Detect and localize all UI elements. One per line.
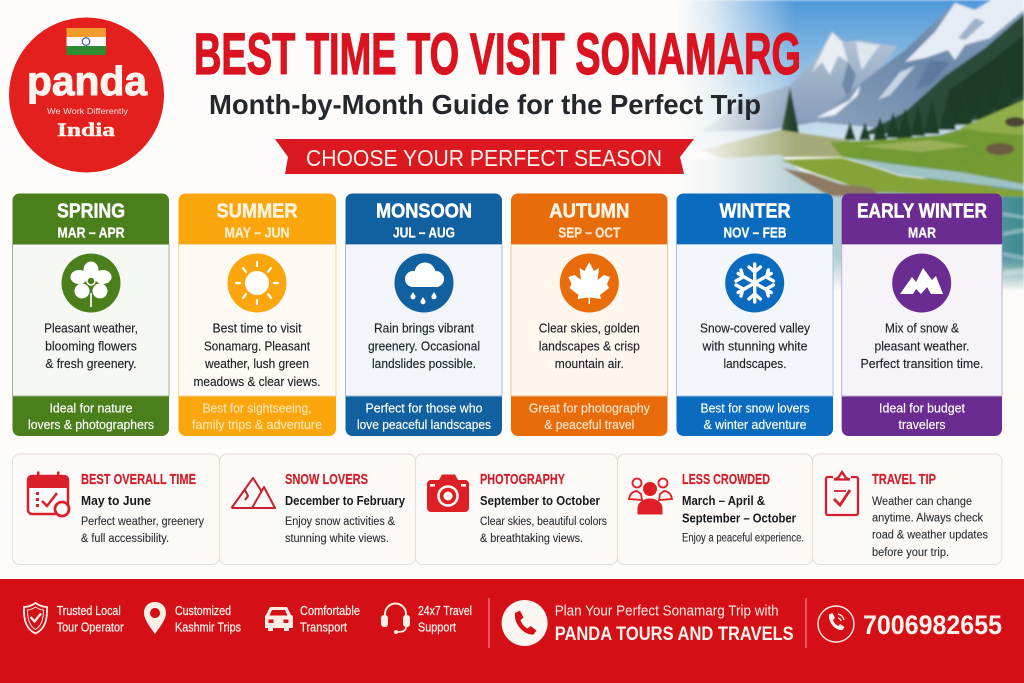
panel: autumn: SEP – OCT [558,226,620,242]
panel: summer: Best for sightseeing, [202,402,312,416]
panel: photography [416,454,618,564]
icon: headset [381,604,410,634]
call to action: Plan Your Perfect Sonamarg Trip with [555,603,779,620]
panel: summer: family trips & adventure [192,418,322,432]
panel: best overall time: & full accessibility. [81,533,169,545]
icon: phone ring [818,606,854,642]
panel: summer: weather, lush green [204,357,309,371]
panel: snow lovers [220,454,416,564]
panel: early winter: pleasant weather. [874,340,970,354]
24x7 travel support: Support [418,621,456,635]
logo country: India [57,120,116,141]
trusted local tour operator: Trusted Local [57,604,121,618]
panel: best overall time: Perfect weather, greenery [81,516,204,528]
panel: monsoon: love peaceful landscapes [357,418,491,432]
panel: photography: September to October [480,493,600,508]
icon: snowy mountains [892,254,951,312]
panel: snow lovers: Enjoy snow activities & [285,516,395,528]
panel: monsoon: JUL – AUG [393,226,455,242]
panel: less crowded: March – April & [682,493,765,508]
ribbon: choose your perfect season [275,139,694,174]
trusted local tour operator [24,603,124,635]
panel: less crowded [618,454,812,564]
panel: travel tip: road & weather updates [872,530,988,542]
panel: less crowded: Enjoy a peaceful experience. [682,533,804,545]
icon: sun [228,254,286,312]
landscape photo: Sonamarg valley [670,0,1024,290]
panel: spring: & fresh greenery. [45,357,137,371]
panel: best overall time [12,454,220,564]
panel: photography: & breathtaking views. [480,533,583,545]
panel: monsoon: MONSOON [376,201,472,223]
phone number [818,606,1002,642]
icon: calendar [28,472,69,516]
icon: map pin [144,602,166,634]
panel: photography: PHOTOGRAPHY [480,471,565,488]
panel: spring: lovers & photographers [28,418,154,432]
panel: summer: SUMMER [216,201,298,223]
logo wordmark: panda [27,58,148,104]
panel: snow lovers: SNOW LOVERS [285,471,368,488]
icon: snowflake [725,254,784,312]
panel: spring [12,194,169,436]
panel: monsoon: greenery. Occasional [368,340,480,354]
icon: phone in white circle [502,600,548,646]
panel: monsoon [346,194,502,436]
panel: early winter: Ideal for budget [879,402,966,416]
logo badge [9,18,164,172]
comfortable transport [265,604,360,635]
icon: flower [62,254,120,312]
panel: monsoon: Rain brings vibrant [374,322,475,336]
24x7 travel support: 24x7 Travel [418,604,472,618]
panel: summer: MAY – JUN [224,226,290,242]
comfortable transport: Transport [300,621,347,635]
icon: maple leaf [560,254,619,312]
panel: best overall time: May to June [81,493,151,508]
panel: photography: Clear skies, beautiful colors [480,516,607,528]
panel: early winter [842,194,1002,436]
panel: travel tip [812,454,1002,564]
panel: spring: Ideal for nature [50,402,133,416]
icon: car [265,607,293,631]
icon: clipboard checklist [826,472,858,515]
panel: winter: landscapes. [724,357,786,371]
panel: travel tip: TRAVEL TIP [872,471,936,488]
panel: spring: Pleasant weather, [44,322,138,336]
icon: people group [629,478,672,514]
panel: winter: with stunning white [702,340,808,354]
panel: autumn: Great for photography [529,402,651,416]
panel: spring: SPRING [57,201,125,223]
panel: travel tip: anytime. Always check [872,513,983,525]
customized kashmir trips [144,602,241,635]
trusted local tour operator: Tour Operator [57,621,124,635]
panel: spring: blooming flowers [45,340,137,354]
call to action [502,600,794,646]
icon: rain cloud [394,254,454,312]
panel: monsoon: Perfect for those who [366,402,483,416]
panel: monsoon: landslides possible. [372,357,476,371]
panel: autumn [511,194,668,436]
icon: outlined mountains [232,478,275,508]
panel: summer: meadows & clear views. [194,375,320,389]
comfortable transport: Comfortable [300,604,360,618]
icon: shield [24,603,47,634]
panel: less crowded: September – October [682,511,796,526]
panel: early winter: MAR [908,226,936,242]
24x7 travel support [381,604,472,635]
panel: early winter: Mix of snow & [885,322,960,336]
panel: early winter: travelers [898,418,946,432]
panel: early winter: Perfect transition time. [860,357,984,371]
customized kashmir trips: Customized [175,604,231,618]
panel: autumn: landscapes & crisp [539,340,640,354]
panel: winter: & winter adventure [704,418,807,432]
panel: summer: Best time to visit [212,322,302,336]
panel: travel tip: before your trip. [872,547,949,559]
customized kashmir trips: Kashmir Trips [175,621,241,635]
call to action: PANDA TOURS AND TRAVELS [555,624,794,645]
icon: camera [427,474,469,512]
panel: winter: WINTER [720,201,791,223]
panel: spring: MAR – APR [58,226,125,242]
panel: winter: NOV – FEB [724,226,786,242]
panel: best overall time: BEST OVERALL TIME [81,471,196,488]
panel: early winter: EARLY WINTER [857,201,987,223]
panel: summer [178,194,336,436]
panel: snow lovers: stunning white views. [285,533,389,545]
panel: autumn: mountain air. [555,357,624,371]
panel: autumn: Clear skies, golden [539,322,640,336]
panel: winter: Best for snow lovers [700,402,810,416]
panel: autumn: AUTUMN [549,201,629,223]
icon: India flag [66,28,106,55]
panel: winter [676,194,833,436]
panel: autumn: & peaceful travel [544,418,634,432]
logo tagline: We Work Differently [47,106,129,116]
panel: winter: Snow-covered valley [700,322,811,336]
subtitle: Month-by-Month Guide for the Perfect Trip [209,89,761,120]
panel: summer: Sonamarg. Pleasant [204,340,310,354]
panel: travel tip: Weather can change [872,496,972,508]
panel: snow lovers: December to February [285,493,406,508]
footer band [0,579,1024,683]
ribbon: choose your perfect season: CHOOSE YOUR PERFECT SEASON [306,145,662,171]
phone number: 7006982655 [863,610,1002,640]
panel: less crowded: LESS CROWDED [682,471,770,488]
photo fade to white (left and bottom) [630,0,1024,296]
